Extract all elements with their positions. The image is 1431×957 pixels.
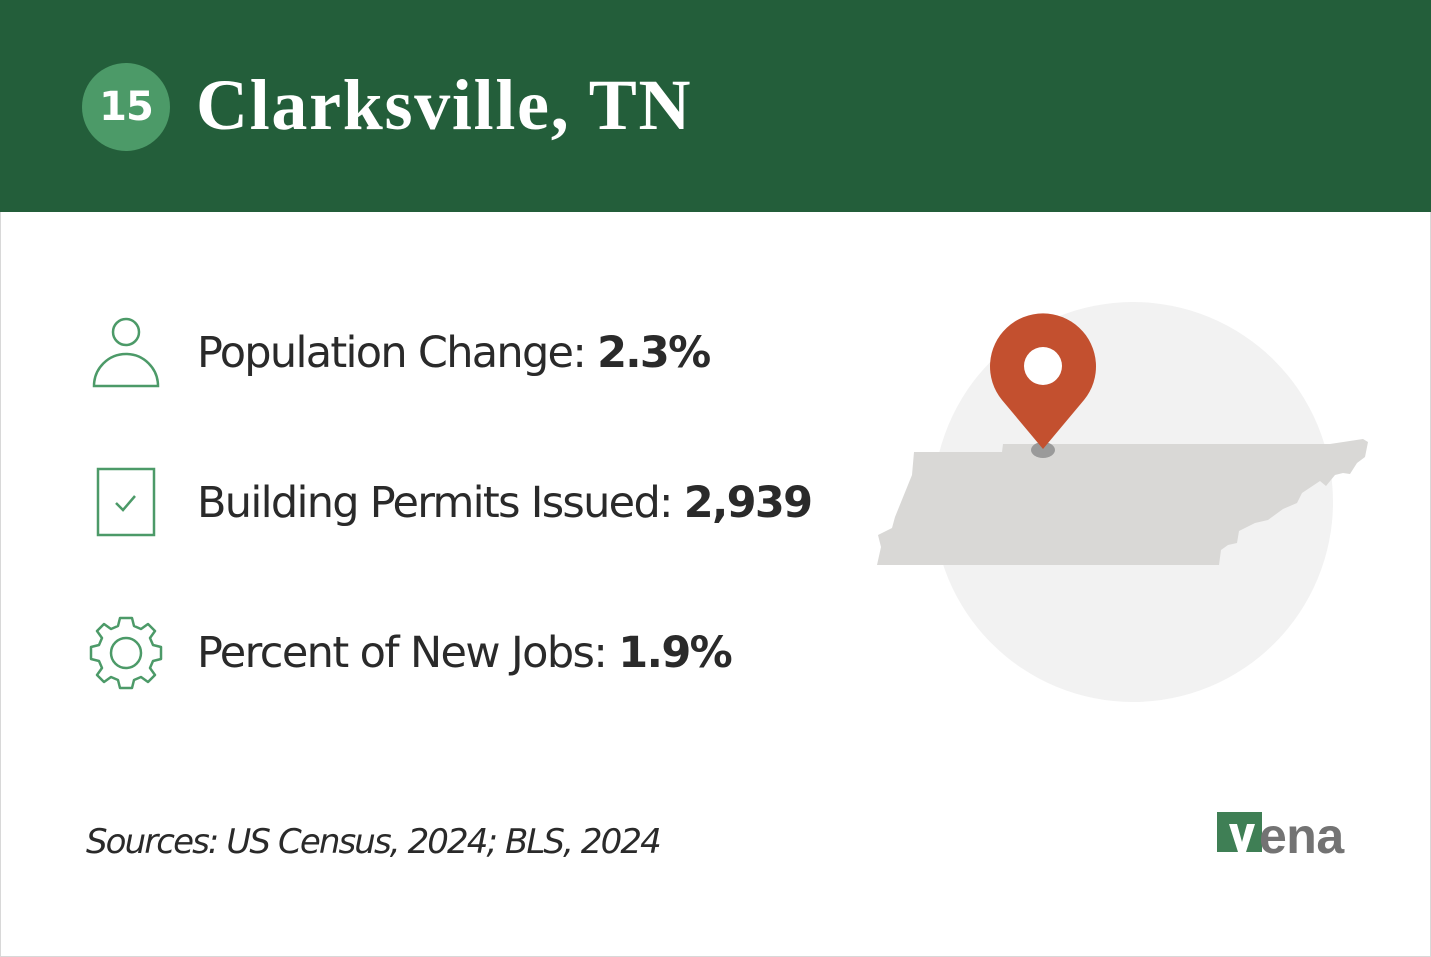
logo: vena: ena	[1259, 808, 1344, 864]
rank badge	[82, 63, 170, 151]
rank badge: 15	[99, 84, 153, 130]
logo: vena	[1217, 808, 1344, 864]
stat: permits: Building Permits Issued: 2,939	[197, 478, 811, 528]
icon: person	[92, 318, 160, 388]
header bar	[0, 0, 1431, 212]
title: Clarksville, TN	[196, 65, 692, 145]
stat: jobs: Percent of New Jobs: 1.9%	[197, 628, 731, 678]
icon: checkbox	[96, 468, 156, 536]
stat: population: Population Change: 2.3%	[197, 328, 710, 378]
icon: gear	[90, 616, 162, 690]
sources: Sources: US Census, 2024; BLS, 2024	[86, 822, 660, 862]
